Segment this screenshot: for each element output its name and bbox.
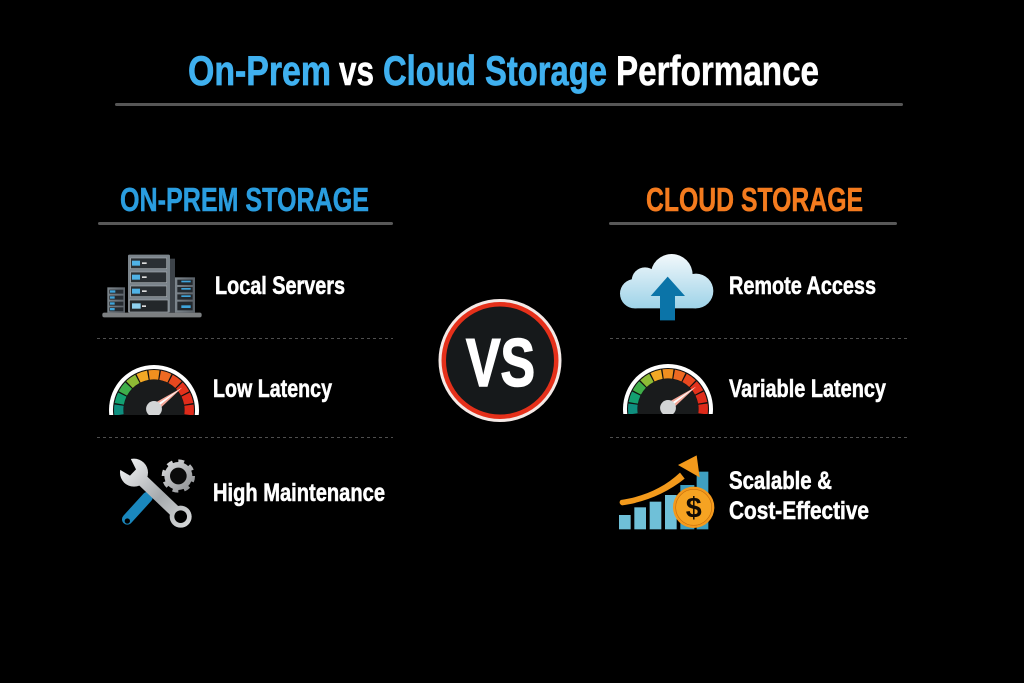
- title: [188, 47, 819, 94]
- label: variable latency: Variable Latency: [729, 375, 886, 403]
- panel: cloud storage: [609, 181, 907, 529]
- icon: cloud upload: [620, 254, 713, 320]
- title: On-Prem: [188, 47, 331, 94]
- label: local servers: Local Servers: [215, 272, 345, 300]
- label: scalable and cost-effective: Scalable &: [729, 467, 832, 495]
- icon: wrench and gear: [110, 457, 193, 528]
- title: Cloud Storage: [383, 47, 607, 94]
- label: scalable and cost-effective: Cost-Effective: [729, 497, 869, 525]
- icon: growth chart and coin: [619, 455, 714, 529]
- title: Performance: [616, 47, 819, 94]
- icon: servers: [102, 255, 202, 317]
- label: low latency: Low Latency: [213, 375, 332, 403]
- label: scalable and cost-effective: [729, 467, 869, 525]
- icon: growth chart and coin: $: [686, 493, 702, 525]
- vs badge: VS: [466, 325, 535, 401]
- vs badge: [438, 299, 562, 422]
- icon: low latency gauge: [104, 360, 204, 460]
- label: remote access: Remote Access: [729, 272, 876, 300]
- label: high maintenance: High Maintenance: [213, 479, 385, 507]
- icon: variable latency gauge: [618, 359, 718, 459]
- panel: on-prem storage: [97, 181, 393, 528]
- title: vs: [339, 47, 374, 94]
- heading: on-prem storage: ON-PREM STORAGE: [120, 181, 369, 218]
- heading: cloud storage: CLOUD STORAGE: [646, 181, 863, 218]
